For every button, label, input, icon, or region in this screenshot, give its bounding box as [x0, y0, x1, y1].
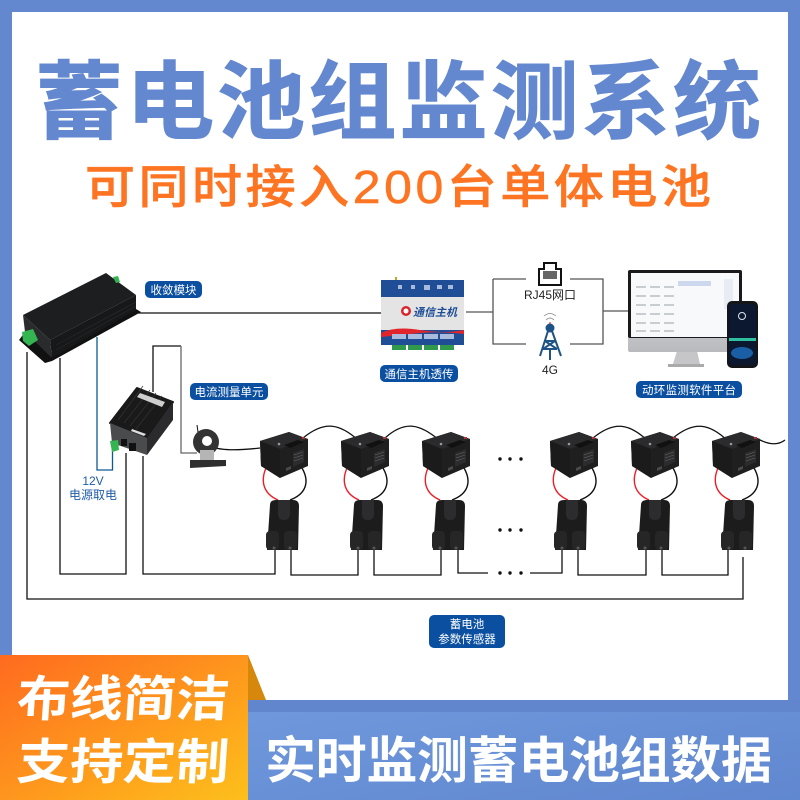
icon: convergence module: [19, 273, 141, 363]
label: battery parameter sensor: 参数传感器: [438, 632, 496, 646]
bottom banner: orange: [0, 655, 248, 800]
label: convergence module: 收敛模块: [150, 283, 197, 297]
continuation dots: [498, 457, 523, 575]
battery sensors row: [266, 500, 754, 550]
label: 12V power supply: 电源取电: [69, 488, 117, 502]
label: current measuring unit: 电流测量单元: [194, 385, 264, 399]
icon: 4G tower: [540, 314, 561, 360]
label: communication host: [380, 365, 458, 382]
icon: current clamp: [190, 425, 226, 468]
label: current measuring unit: [190, 383, 268, 400]
label: convergence module: [145, 281, 202, 298]
label: battery parameter sensor: [429, 615, 505, 648]
label: 12V power supply: 12V: [82, 474, 104, 488]
label: monitoring platform: 动环监测软件平台: [642, 383, 736, 397]
bottom banner: orange: 支持定制: [15, 735, 231, 790]
icon: communication host: [381, 277, 464, 350]
label: battery parameter sensor: 蓄电池: [450, 618, 485, 631]
icon: monitor with platform: [628, 270, 758, 368]
bottom banner: blue: [248, 655, 800, 800]
label: communication host: 通信主机透传: [384, 367, 454, 381]
subtitle: 可同时接入200台单体电池: [85, 163, 711, 214]
icon: current measuring unit: [110, 386, 173, 455]
label: monitoring platform: [636, 381, 742, 398]
bottom banner: blue: 实时监测蓄电池组数据: [265, 732, 772, 789]
bottom banner: orange: 布线简洁: [15, 672, 231, 727]
batteries row: [260, 432, 760, 500]
label: 12V power supply: [69, 474, 117, 502]
icon: communication host: 通信主机: [413, 306, 458, 319]
label: RJ45: RJ45网口: [524, 288, 576, 302]
title: 蓄电池组监测系统: [35, 56, 761, 151]
wiring network: [27, 279, 785, 599]
label: 4G: 4G: [542, 363, 558, 377]
icon: RJ45 port: [539, 263, 561, 285]
